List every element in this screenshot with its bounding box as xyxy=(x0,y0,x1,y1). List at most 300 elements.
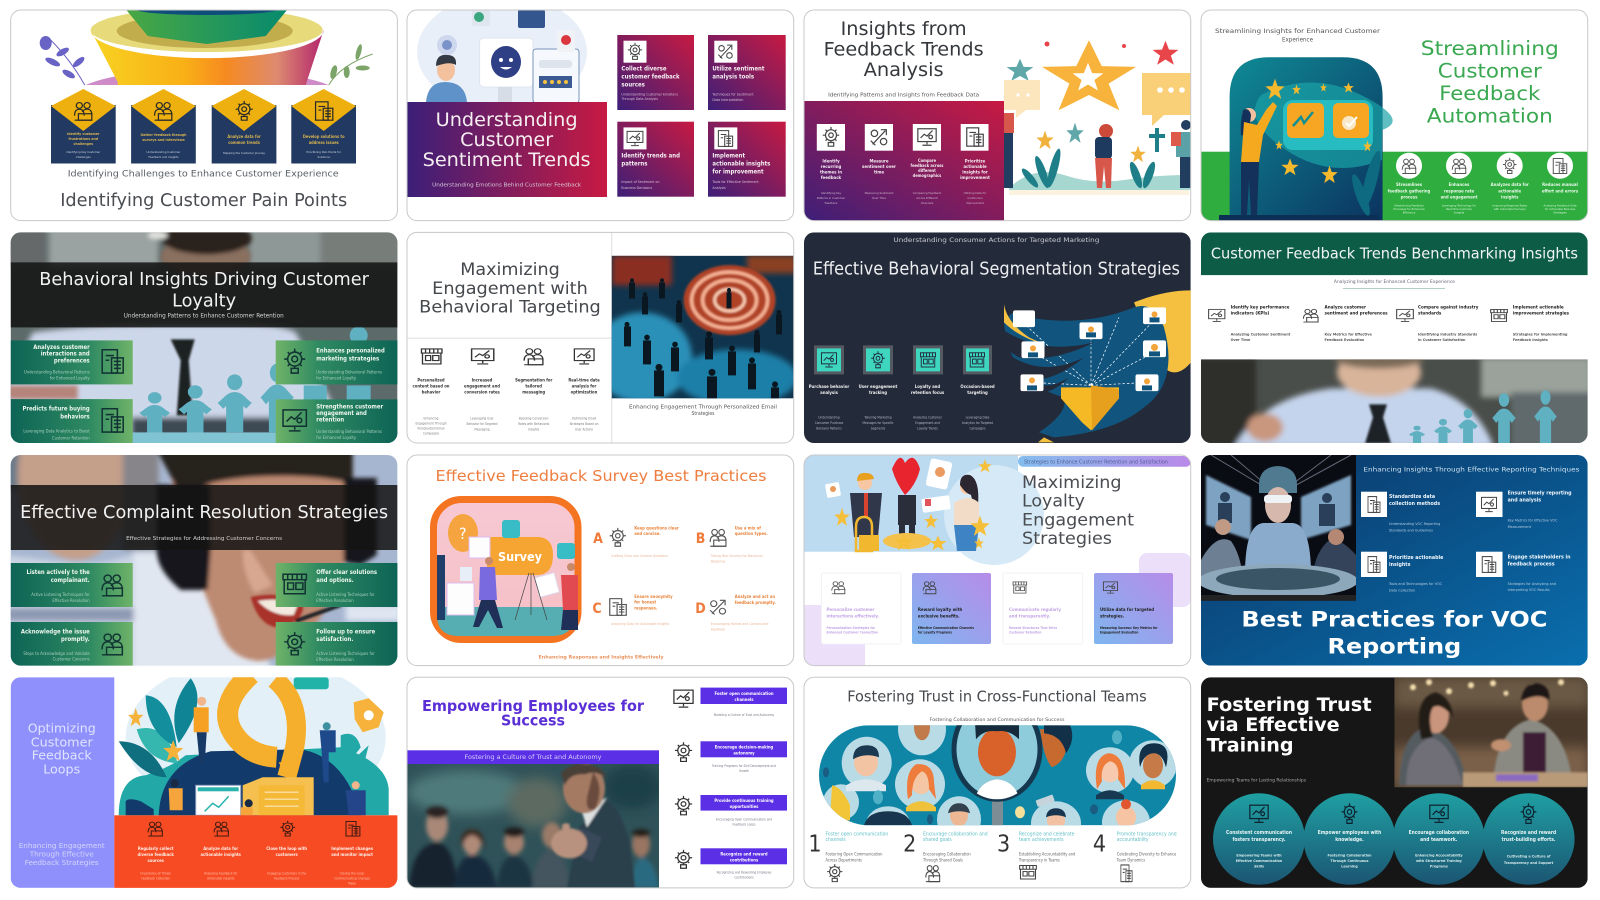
image caption xyxy=(629,404,777,417)
column: collect diverse: sources xyxy=(147,858,165,863)
column: implement changes: Communicating Changes xyxy=(334,876,371,880)
background photo xyxy=(1196,348,1591,452)
card: communicate: Communicate regularly xyxy=(1009,607,1061,613)
item: continuous training xyxy=(675,795,787,826)
item C: responses. xyxy=(634,606,658,610)
item: streamlines gathering: Streamlining Feedback xyxy=(1394,204,1424,208)
item: response rate: Enhances xyxy=(1449,182,1470,188)
item: continuous training: Provide continuous training xyxy=(714,798,774,803)
card: acknowledge issue: Steps to Acknowledge and Validate xyxy=(23,651,90,656)
header band xyxy=(1201,232,1588,275)
title xyxy=(419,260,601,317)
card: follow up xyxy=(276,622,398,666)
item: streamlines gathering: Streamlines xyxy=(1396,182,1423,188)
item: loyalty focus: Loyalty and xyxy=(915,384,940,390)
step 4: 4 xyxy=(1093,831,1106,857)
column: real-time data: analysis for xyxy=(572,383,596,388)
item: foster communication: Foster open communication xyxy=(714,691,774,696)
title: Effective Behavioral Segmentation Strategies xyxy=(813,259,1180,279)
panel: cross-functional trust xyxy=(804,677,1191,888)
item: loyalty focus: Analyzing Customer xyxy=(913,415,943,419)
item: purchase behavior xyxy=(809,345,849,430)
survey illustration xyxy=(434,500,578,640)
item: reduces effort xyxy=(1542,153,1579,215)
card: predicts buying: Predicts future buying xyxy=(22,407,90,413)
card: collect feedback: customer feedback xyxy=(621,74,680,81)
column: real-time data: Strategies Based on xyxy=(570,422,599,426)
oval: recognize reward: Recognize and reward xyxy=(1501,830,1556,836)
column: segmentation: Boosting Conversion xyxy=(519,416,549,420)
step 1 xyxy=(808,831,888,882)
step 4: accountability xyxy=(1117,837,1149,843)
subtitle: Identifying Patterns and Insights from Feedback Data xyxy=(828,93,979,99)
oval: encourage collaboration: Enhancing Accountability xyxy=(1415,853,1463,857)
item: prioritize: Tools and Technologies for VOC xyxy=(1389,581,1443,586)
card: strengthens engagement: Understanding Behavioral Patterns xyxy=(316,429,382,434)
card: sentiment tools: Data Interpretation xyxy=(712,98,743,102)
item: reduces effort: Reduces manual xyxy=(1542,182,1578,188)
item: KPIs: indicators (KPIs) xyxy=(1231,310,1269,316)
card: analyze data xyxy=(212,89,276,164)
column: segmentation xyxy=(515,349,552,431)
card: analyzes interactions xyxy=(11,340,133,384)
pointing man photo xyxy=(407,763,662,888)
column: increased engagement xyxy=(464,349,500,431)
column: prioritize insights: improvement xyxy=(960,175,990,181)
item: foster communication: channels xyxy=(735,697,754,702)
oval: empower employees: Empower employees with xyxy=(1318,830,1381,836)
card: acknowledge issue: Acknowledge the issue xyxy=(21,630,90,636)
item: implement strategies: Strategies for Implementing xyxy=(1513,331,1568,336)
card: personalize: interactions effectively. xyxy=(826,614,880,620)
funnel illustration xyxy=(40,3,373,85)
title: Success xyxy=(501,712,565,730)
step 3: Transparency in Teams xyxy=(1018,857,1060,862)
column: real-time data: optimization xyxy=(571,389,598,394)
item: reduces effort: effort and errors xyxy=(1542,188,1579,194)
column: increased engagement: engagement and xyxy=(464,383,500,388)
image caption: Enhancing Engagement Through Personalized Email xyxy=(629,404,777,410)
green band xyxy=(1201,152,1588,221)
card: collect feedback: sources xyxy=(621,82,645,89)
card: reward loyalty: for Loyalty Programs xyxy=(918,630,952,634)
item B: Use a mix of xyxy=(735,526,761,530)
step 3 xyxy=(997,831,1075,879)
oval: recognize reward: Cultivating a Culture of xyxy=(1507,854,1551,858)
column: implement changes xyxy=(331,821,374,885)
item: timely reporting: Key Metrics for Effective VOC xyxy=(1508,518,1558,522)
column: segmentation: Insights xyxy=(528,427,540,431)
step 2: Through Shared Goals xyxy=(922,857,963,862)
card: develop solutions: Solutions xyxy=(317,155,330,159)
item B: B xyxy=(696,531,705,547)
card: strengthens engagement: for Enhanced Loyalty xyxy=(316,435,357,440)
card: gather feedback: surveys and interviews xyxy=(142,138,185,142)
title: Automation xyxy=(1427,105,1553,128)
title: Behavioral Targeting xyxy=(419,297,601,317)
item C xyxy=(592,594,673,626)
title banner: Behavioral Insights Driving Customer xyxy=(39,270,369,290)
card: actionable insights: Analysis xyxy=(712,186,726,190)
item: continuous training: Encouraging Open Communication and xyxy=(716,817,772,821)
column: close the loop: Close the loop with xyxy=(266,846,307,851)
subtitle: Experience xyxy=(1282,37,1314,44)
step 4: Celebrating Diversity to Enhance xyxy=(1117,851,1177,856)
title: Engagement xyxy=(1022,510,1134,530)
column: compare feedback xyxy=(911,124,943,205)
subtitle: Identifying Challenges to Enhance Customer Experience xyxy=(68,170,339,180)
left sidebar: Feedback xyxy=(32,748,92,763)
card: actionable insights xyxy=(708,122,786,197)
title: Analysis xyxy=(864,60,944,81)
cafe conversation photo xyxy=(1394,677,1589,787)
oval: recognize reward: trust-building efforts. xyxy=(1502,837,1556,843)
column: segmentation: messaging xyxy=(522,389,545,394)
oval: consistent communication: Consistent communication xyxy=(1226,830,1292,836)
card: strengthens engagement: retention xyxy=(316,418,344,424)
funnel illustration xyxy=(990,290,1191,442)
item: occasion targeting: Leveraging Data xyxy=(966,415,990,419)
card: analyze data: Analyze data for xyxy=(227,134,261,139)
panel: behavioral targeting xyxy=(407,232,797,443)
column: identify themes: Patterns in Customer xyxy=(817,196,846,200)
panel: feedback loops xyxy=(11,657,398,888)
card: follow up: Follow up to ensure xyxy=(316,630,376,636)
item: timely reporting: Measurement xyxy=(1508,524,1532,529)
card: analyzes interactions: Analyzes customer xyxy=(33,345,90,351)
item: compare standards: Compare against industry xyxy=(1418,304,1479,310)
card: listen actively: Active Listening Techniques for xyxy=(31,592,90,597)
tagline band xyxy=(407,750,659,764)
column: real-time data xyxy=(568,349,600,431)
panel: feedback automation xyxy=(1201,10,1588,221)
item: timely reporting: and analysis xyxy=(1508,498,1541,504)
card: gather feedback xyxy=(131,89,196,164)
item: compare standards: standards xyxy=(1418,310,1442,316)
card: acknowledge issue: promptly. xyxy=(61,637,90,643)
title: Effective Feedback Survey Best Practices xyxy=(436,467,766,485)
card: acknowledge issue: Customer Concerns xyxy=(53,656,90,662)
item D: Feedback xyxy=(711,628,725,632)
item: user engagement: Messages for Specific xyxy=(862,421,894,425)
card: listen actively: Effective Resolution xyxy=(52,598,90,603)
item: occasion targeting xyxy=(960,345,995,430)
card: follow up: Effective Resolution xyxy=(316,657,354,662)
item: encourage autonomy: Growth xyxy=(739,769,749,773)
title xyxy=(1422,40,1557,123)
item: response rate xyxy=(1441,153,1478,215)
card: enhances marketing: for Enhanced Loyalty xyxy=(316,375,357,380)
card: personalize xyxy=(821,573,901,644)
item: purchase behavior: Behavior Patterns xyxy=(816,426,842,430)
item: loyalty focus: Engagement and xyxy=(915,421,940,425)
card: collect feedback: Collect diverse xyxy=(621,66,667,73)
card: utilize data: Measuring Success: Key Metrics for xyxy=(1100,626,1158,630)
item B xyxy=(696,526,768,564)
oval: empower employees xyxy=(1304,793,1396,885)
card: reward loyalty xyxy=(912,573,991,644)
step 3: Recognize and celebrate xyxy=(1019,831,1075,837)
card: identify frustrations: Identifying Key Customer xyxy=(66,150,101,154)
item: analyze customer xyxy=(1303,304,1388,342)
item: response rate: and engagement xyxy=(1441,195,1478,201)
title xyxy=(1207,695,1372,757)
title: Loyalty xyxy=(1022,492,1085,512)
card: strengthens engagement: engagement and xyxy=(316,411,367,417)
title xyxy=(1241,608,1547,658)
item: streamlines gathering: Efficiency xyxy=(1403,211,1416,215)
oval: encourage collaboration: Programs xyxy=(1430,865,1448,869)
feedback illustration xyxy=(119,657,389,817)
item D xyxy=(695,594,776,632)
item: implement strategies: Feedback Insights xyxy=(1513,337,1548,342)
footer caption: Enhancing Responses and Insights Effectively xyxy=(538,654,664,660)
card: identify frustrations: Challenges xyxy=(76,155,91,159)
column: analyze data xyxy=(200,822,242,880)
oval: consistent communication: fosters transparency. xyxy=(1232,837,1286,843)
card: gather feedback: Gather feedback through xyxy=(141,133,187,137)
card: actionable insights: for improvement xyxy=(712,168,764,176)
card: identify frustrations: frustrations and xyxy=(69,137,99,141)
item: streamlines gathering: feedback gathering xyxy=(1388,188,1431,194)
left sidebar: Enhancing Engagement xyxy=(19,841,105,850)
column: measure sentiment: Over Time xyxy=(872,196,886,200)
item: loyalty focus: Loyalty Trends xyxy=(917,426,938,430)
item: analyze customer: Key Metrics for Effective xyxy=(1324,331,1372,336)
item: KPIs: Analyzing Customer Sentiment xyxy=(1231,331,1291,336)
card: trends and patterns xyxy=(617,122,694,197)
title banner: Understanding Emotions Behind Customer Feedback xyxy=(432,182,581,188)
panel: trust via training xyxy=(1201,677,1589,888)
item: standardize xyxy=(1361,492,1440,532)
item: response rate: Leveraging Technology for xyxy=(1442,204,1477,208)
column: personalized content: Engagement Through xyxy=(415,421,447,425)
subtitle xyxy=(1215,28,1381,44)
title: Reporting xyxy=(1328,634,1461,658)
card: listen actively xyxy=(11,563,133,607)
subtitle: Empowering Teams for Lasting Relationships xyxy=(1207,778,1306,783)
column: analyze data: Analyzing Feedback for xyxy=(204,871,238,875)
panel: loyalty engagement xyxy=(796,455,1191,675)
card: sentiment tools: Utilize sentiment xyxy=(712,66,765,73)
card: offer solutions: Offer clear solutions xyxy=(316,570,377,576)
title: Strategies xyxy=(1022,529,1112,549)
panel: customer pain points xyxy=(40,10,373,210)
column: compare feedback: different xyxy=(918,168,936,173)
item: analyze customer: sentiment and preferences xyxy=(1324,310,1388,316)
oval: encourage collaboration: Encourage collaboration xyxy=(1409,830,1469,836)
panel: feedback survey best practices xyxy=(407,455,794,666)
item: analyzes data: actionable xyxy=(1498,188,1521,194)
card: collect feedback: Understanding Customer Emotions xyxy=(621,92,678,96)
column: measure sentiment xyxy=(862,124,896,200)
column: implement changes: Closing the Loop: xyxy=(340,871,365,875)
item A: and concise. xyxy=(634,531,661,536)
column: analyze data: Analyze data for xyxy=(203,846,238,851)
column: personalized content: content based on xyxy=(413,383,450,388)
subtitle: Fostering Collaboration and Communication for Success xyxy=(930,717,1064,723)
item: occasion targeting: targeting xyxy=(967,390,988,396)
oval: encourage collaboration: and teamwork. xyxy=(1420,837,1458,843)
card: actionable insights: Tools for Effective Sentiment xyxy=(712,180,759,184)
oval: encourage collaboration xyxy=(1393,793,1485,885)
card: develop solutions xyxy=(291,89,356,164)
title: Maximizing xyxy=(1022,473,1122,493)
card: communicate: Reward Structures That Drive xyxy=(1009,626,1057,630)
card: trends and patterns: Business Decisions xyxy=(621,186,652,190)
card: reward loyalty: Effective Communication Channels xyxy=(918,626,974,630)
card: identify frustrations: Identify customer xyxy=(67,132,100,136)
item: reduces effort: Strategies xyxy=(1553,211,1567,215)
card: sentiment tools: Techniques for Sentiment xyxy=(712,92,754,96)
item B: question types. xyxy=(735,531,768,536)
column: prioritize insights: actionable xyxy=(963,164,987,170)
item C: Ensure anonymity xyxy=(634,594,673,599)
panel: feedback benchmarking xyxy=(1196,232,1591,452)
card: trends and patterns: Identify trends and xyxy=(621,152,680,160)
column: measure sentiment: Measuring Sentiment xyxy=(865,191,893,195)
card: utilize data: Engagement Evaluation xyxy=(1100,630,1138,634)
column: increased engagement: Leveraging User xyxy=(470,416,495,420)
column: prioritize insights: Continuous xyxy=(967,196,983,200)
column: prioritize insights: insights for xyxy=(962,170,988,176)
column: measure sentiment: time xyxy=(874,170,884,176)
column: analyze data: actionable insights xyxy=(200,852,242,857)
card: analyze data: Mapping the Customer Journey xyxy=(223,151,265,155)
title: Fostering Trust xyxy=(1207,695,1372,716)
column: implement changes: and monitor impact xyxy=(331,852,373,857)
column: identify themes: recurring xyxy=(821,164,842,170)
survey illustration: Survey xyxy=(498,549,543,564)
left sidebar: Through Effective xyxy=(29,849,94,858)
card: actionable insights: actionable insights xyxy=(712,160,770,168)
target crowd image xyxy=(592,255,797,405)
item: recognize contributions: contributions xyxy=(730,857,759,862)
item: purchase behavior: Consumer Purchase xyxy=(815,421,844,425)
card: predicts buying: Leveraging Data Analytics to Boost xyxy=(23,429,90,434)
item B: Response xyxy=(711,560,725,564)
column: compare feedback: Across Different xyxy=(916,196,938,200)
column: close the loop: customers xyxy=(276,852,299,857)
title banner: Understanding xyxy=(436,110,578,131)
card: identify frustrations: challenges xyxy=(74,142,93,146)
background photo xyxy=(10,232,398,443)
title: Streamlining xyxy=(1421,37,1559,60)
column: identify themes xyxy=(817,124,846,205)
card: utilize data: strategies. xyxy=(1100,614,1125,620)
title: Feedback xyxy=(1439,82,1541,105)
title banner: Loyalty xyxy=(172,292,236,312)
title: Empowering Employees for xyxy=(422,697,644,715)
column: identify themes: Identifying Key xyxy=(821,191,841,195)
item: loyalty focus: retention focus xyxy=(911,390,945,396)
card: communicate: and transparently. xyxy=(1009,614,1051,620)
item A: A xyxy=(593,531,603,547)
oval: consistent communication: Effective Communication xyxy=(1236,859,1283,863)
left sidebar xyxy=(11,677,114,888)
item: recognize contributions: Recognize and reward xyxy=(720,851,768,856)
item: analyze customer: Feedback Evaluation xyxy=(1324,337,1365,342)
item: standardize: Understanding VOC Reporting xyxy=(1389,521,1440,526)
item: purchase behavior: Understanding xyxy=(818,415,840,419)
item: response rate: Real-Time Customer xyxy=(1446,207,1473,211)
column: segmentation: Rates with Behavioral xyxy=(518,422,550,426)
item: prioritize: Prioritize actionable xyxy=(1389,555,1443,561)
step 1: Fostering Open Communication xyxy=(826,851,882,856)
orange band xyxy=(114,815,398,888)
item C: Analyzing Data for Actionable Insights xyxy=(611,622,670,626)
card: analyzes interactions: Understanding Behavioral Patterns xyxy=(24,369,90,374)
column: close the loop: Feedback Process xyxy=(274,876,300,880)
card: predicts buying: behaviors xyxy=(60,414,90,420)
item: compare standards: Identifying Industry Standards xyxy=(1418,331,1477,336)
title: Feedback Trends xyxy=(824,40,984,60)
item: stakeholders: Engage stakeholders in xyxy=(1508,554,1571,560)
header band: Customer Feedback Trends Benchmarking Insights xyxy=(1211,244,1578,262)
column: personalized content: Personalized Email xyxy=(418,426,445,430)
column: measure sentiment: Measure xyxy=(869,158,889,164)
step 2: Encouraging Collaboration xyxy=(923,851,971,856)
column: segmentation: tailored xyxy=(525,383,542,388)
item: implement strategies: improvement strategies xyxy=(1513,310,1570,316)
oval: consistent communication: Empowering Teams with xyxy=(1236,853,1282,857)
card: follow up: satisfaction. xyxy=(316,637,353,643)
card: utilize data xyxy=(1094,573,1173,644)
oval: recognize reward xyxy=(1483,793,1575,885)
item A xyxy=(593,526,679,558)
title: Insights from xyxy=(841,19,967,40)
item: compare standards xyxy=(1397,304,1479,342)
item: continuous training: Feedback Loops xyxy=(733,822,756,826)
column: real-time data: Real-time data xyxy=(568,377,600,382)
title: Training xyxy=(1207,736,1294,757)
item: stakeholders: Strategies for Analyzing and xyxy=(1508,581,1556,586)
subtitle: Streamlining Insights for Enhanced Customer xyxy=(1215,28,1381,35)
title: Customer xyxy=(1438,60,1543,82)
step 1: Foster open communication xyxy=(826,831,888,837)
item: analyzes data: insights xyxy=(1501,195,1519,201)
step 2: Encourage collaboration and xyxy=(923,831,988,837)
panel: feedback trends analysis xyxy=(804,10,1191,221)
step 2 xyxy=(903,831,988,882)
item: prioritize: insights xyxy=(1389,562,1411,568)
item: occasion targeting: Campaigns xyxy=(969,426,986,430)
card: strengthens engagement xyxy=(276,399,398,443)
card: sentiment tools: analysis tools xyxy=(712,74,754,81)
subtitle: Understanding Consumer Actions for Targeted Marketing xyxy=(893,237,1099,244)
column: increased engagement: Behavior for Targeted xyxy=(467,422,498,426)
panel: VOC reporting xyxy=(1198,455,1588,666)
column: analyze data: Actionable Insights xyxy=(207,876,235,880)
column: segmentation: Segmentation for xyxy=(515,377,552,382)
item: loyalty focus xyxy=(911,345,945,430)
card: develop solutions: Prioritizing Pain Points for xyxy=(307,150,342,154)
step 4: Team Dynamics xyxy=(1116,857,1145,862)
item: prioritize: Data Collection xyxy=(1389,588,1415,592)
title: Fostering Trust in Cross-Functional Teams xyxy=(847,688,1147,706)
title banner: Sentiment Trends xyxy=(423,150,591,171)
item C: for honest xyxy=(634,600,656,605)
card: personalize: Enhanced Customer Connection xyxy=(826,630,878,634)
column: prioritize insights: Prioritize xyxy=(965,158,986,164)
automation illustration xyxy=(1219,57,1393,221)
item: streamlines gathering: Processes for Enhanced xyxy=(1394,207,1425,211)
item: implement strategies: Implement actionable xyxy=(1513,304,1564,310)
card: communicate: Customer Retention xyxy=(1009,630,1041,634)
sentiment illustration xyxy=(417,10,587,102)
column: increased engagement: Messaging xyxy=(474,427,490,431)
item D: Encouraging Honest and Constructive xyxy=(711,622,769,626)
